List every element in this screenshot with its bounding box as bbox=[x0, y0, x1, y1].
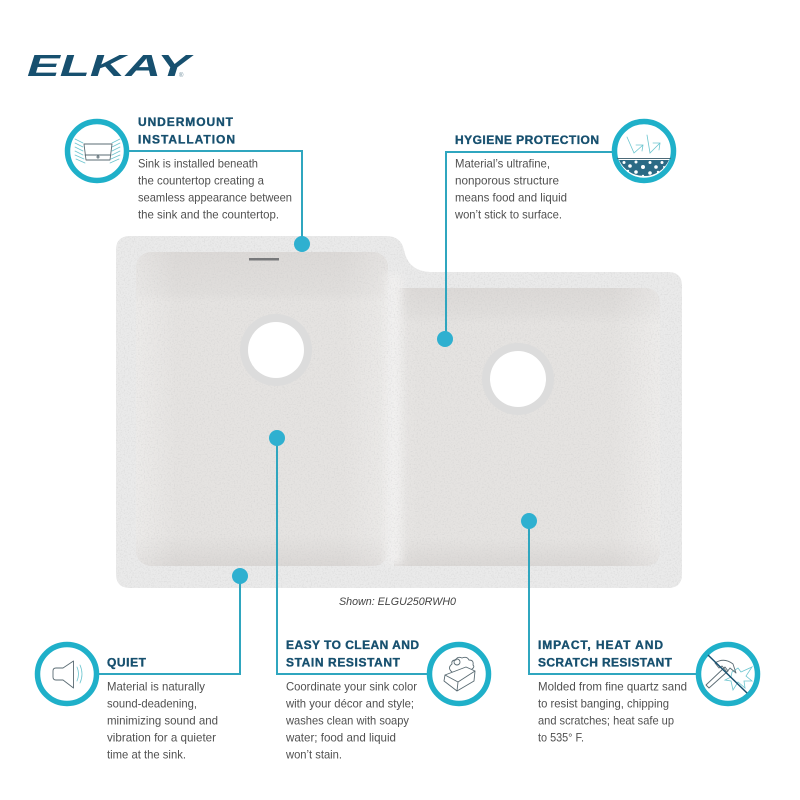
speckle texture bbox=[116, 236, 682, 588]
description: Coordinate your sink color bbox=[286, 680, 417, 694]
heading: INSTALLATION bbox=[138, 132, 235, 146]
description: minimizing sound and bbox=[107, 714, 218, 728]
description: Sink is installed beneath bbox=[138, 158, 258, 170]
connector bbox=[125, 151, 310, 252]
description: to resist banging, chipping bbox=[538, 698, 669, 710]
description: to 535° F. bbox=[538, 732, 584, 744]
description bbox=[454, 158, 567, 222]
description: water; food and liquid bbox=[285, 732, 396, 744]
description: the countertop creating a bbox=[138, 174, 264, 188]
heading bbox=[538, 638, 673, 670]
heading: SCRATCH RESISTANT bbox=[538, 656, 673, 670]
description: Material is naturally bbox=[107, 680, 205, 694]
logo: Elkay: ELKAY bbox=[27, 48, 195, 83]
logo: Elkay bbox=[27, 48, 195, 83]
connector bbox=[95, 568, 248, 674]
connector bbox=[269, 430, 432, 674]
description: vibration for a quieter bbox=[107, 732, 216, 744]
panel: hygiene protection bbox=[437, 122, 674, 347]
icon: soap bar bbox=[430, 644, 488, 704]
icon: speaker bbox=[38, 644, 96, 704]
heading: EASY TO CLEAN AND bbox=[286, 638, 419, 652]
description: Material’s ultrafine, bbox=[455, 158, 550, 170]
heading bbox=[138, 115, 235, 146]
description: seamless appearance between bbox=[138, 192, 292, 204]
description: time at the sink. bbox=[107, 748, 186, 762]
description: means food and liquid bbox=[455, 192, 567, 204]
panel: impact, heat and scratch resistant bbox=[521, 513, 758, 744]
basin divider bbox=[386, 274, 402, 564]
connector bbox=[437, 152, 615, 347]
right basin bbox=[394, 288, 660, 566]
heading: STAIN RESISTANT bbox=[286, 656, 401, 670]
description: Molded from fine quartz sand bbox=[538, 680, 687, 694]
logo: Elkay: ® bbox=[179, 72, 184, 79]
description: won’t stick to surface. bbox=[454, 208, 562, 222]
caption: Shown: ELGU250RWH0 bbox=[339, 596, 457, 608]
heading bbox=[286, 638, 419, 670]
panel: easy to clean bbox=[269, 430, 488, 762]
heading: QUIET bbox=[107, 656, 147, 670]
heading: IMPACT, HEAT AND bbox=[538, 638, 663, 652]
description: washes clean with soapy bbox=[285, 714, 409, 728]
description: with your décor and style; bbox=[285, 698, 414, 710]
icon: nonporous surface bbox=[614, 122, 674, 180]
sink rim bbox=[116, 236, 682, 588]
clip bracket bbox=[249, 258, 279, 260]
description: the sink and the countertop. bbox=[138, 208, 279, 222]
panel: quiet bbox=[38, 568, 248, 762]
left drain bbox=[240, 314, 312, 386]
description: and scratches; heat safe up bbox=[538, 714, 674, 728]
connector bbox=[521, 513, 700, 674]
panel: undermount installation bbox=[68, 115, 310, 252]
description: nonporous structure bbox=[455, 174, 559, 188]
sink illustration bbox=[116, 236, 682, 588]
description: sound-deadening, bbox=[107, 698, 197, 710]
description bbox=[138, 158, 292, 222]
icon: undermount sink bbox=[68, 122, 126, 180]
left basin bbox=[136, 252, 388, 566]
description: won’t stain. bbox=[285, 748, 342, 762]
heading: UNDERMOUNT bbox=[138, 115, 234, 129]
description bbox=[538, 680, 687, 744]
heading: HYGIENE PROTECTION bbox=[455, 133, 599, 147]
icon: crossed hammer bbox=[698, 644, 758, 704]
right drain bbox=[482, 343, 554, 415]
description bbox=[285, 680, 417, 762]
description bbox=[107, 680, 218, 762]
